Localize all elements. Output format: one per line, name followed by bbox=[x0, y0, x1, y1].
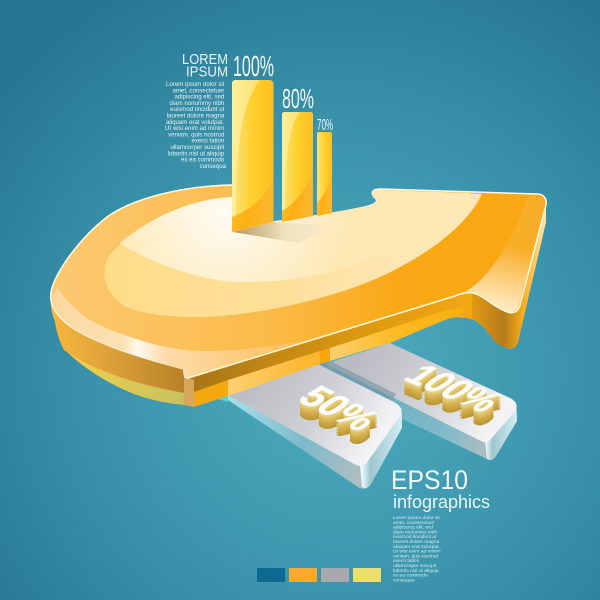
arrow tip highlight bbox=[463, 196, 545, 312]
bar 100% bbox=[232, 80, 274, 232]
text block: bottom description: euismod tincidunt ut bbox=[393, 534, 437, 540]
legend: colour swatches bbox=[257, 568, 381, 582]
label: 80%: 80% bbox=[282, 83, 314, 114]
label: 50% 3D text: 50% bbox=[288, 386, 388, 443]
label: 100% 3D text: 100% bbox=[395, 370, 513, 430]
text block: bottom description: ullamcorper suscipit bbox=[393, 563, 437, 569]
text block: bottom description: Lorem ipsum dolor sit bbox=[393, 515, 440, 521]
text block: bottom description: Ut wisi enim ad minim bbox=[393, 549, 441, 555]
text block: top description: laoreet dolore magna bbox=[167, 112, 225, 120]
arrow front edge highlight bbox=[188, 293, 484, 378]
label: 50% 3D text: 50% bbox=[288, 394, 388, 451]
text block: top description: veniam, quis nostrud bbox=[168, 131, 224, 138]
text block: bottom description: aliquam erat volutpat. bbox=[393, 544, 440, 550]
text block: top description: ullamcorper suscipit bbox=[170, 144, 225, 151]
arrow top surface bbox=[51, 185, 546, 378]
text block: top description: Ut wisi enim ad minim bbox=[165, 125, 224, 132]
panel: 50% grey arrow tab bbox=[218, 361, 402, 489]
panel: 100% grey arrow tab bbox=[325, 343, 517, 460]
label: 50% 3D text: 50% bbox=[288, 390, 388, 447]
arrow inner cream area bbox=[104, 190, 482, 317]
panel: bar chart bbox=[232, 80, 335, 243]
arrow light rim bbox=[52, 288, 320, 377]
heading: lorem ipsum: IPSUM bbox=[186, 64, 228, 80]
text block: top description: ex ea commodo bbox=[181, 157, 225, 164]
heading: lorem ipsum: LOREM bbox=[182, 52, 228, 68]
bar 70% bbox=[317, 132, 332, 216]
text block: top description: Lorem ipsum dolor sit bbox=[166, 81, 225, 88]
arrow inner glow bbox=[120, 197, 365, 282]
text block: bottom description: veniam, quis nostrud bbox=[393, 553, 438, 559]
text block: bottom description: exerci tation bbox=[393, 558, 420, 564]
label: 50% 3D text: 50% bbox=[288, 380, 388, 437]
label: 50% 3D text: 50% bbox=[288, 384, 388, 441]
text block: top description: exerci tation bbox=[191, 138, 224, 145]
text block: bottom description: lobortis nisl ut aliquip bbox=[393, 568, 439, 574]
text block: top description: diam nonummy nibh bbox=[169, 100, 224, 107]
arrow inner light area bbox=[120, 190, 470, 282]
label: 100% 3D text: 100% bbox=[395, 364, 513, 424]
heading: lorem ipsum bbox=[182, 52, 228, 80]
label: 100% 3D text: 100% bbox=[395, 366, 513, 426]
arrow front wall bbox=[184, 205, 546, 407]
label: 50% 3D text: 50% bbox=[288, 392, 388, 449]
text block: top description: adipiscing elit, sed bbox=[174, 94, 224, 101]
text block: bottom description: ex ea commodo bbox=[393, 573, 428, 579]
text block: top description: euismod tincidunt ut bbox=[170, 106, 225, 113]
text block: bottom description: amet, consectetuer bbox=[393, 520, 435, 526]
label: 100% 3D text: 100% bbox=[395, 368, 513, 428]
text block: top description: amet, consectetuer bbox=[172, 87, 224, 94]
label: 100%: 100% bbox=[233, 51, 274, 83]
label: 100% 3D text: 100% bbox=[395, 372, 513, 432]
bar 80% bbox=[282, 112, 313, 222]
text block: bottom description: laoreet dolore magna bbox=[393, 539, 439, 545]
heading: infographics: infographics bbox=[393, 492, 490, 512]
text block: top description: lobortis nisl ut aliquip bbox=[168, 150, 225, 157]
label: 100% 3D text: 100% bbox=[395, 358, 513, 418]
text block: bottom description: diam nonummy nibh bbox=[393, 529, 437, 535]
label: 50% 3D text: 50% bbox=[288, 382, 388, 439]
text: 70% bbox=[317, 117, 333, 134]
text block: top description: aliquam erat volutpat. bbox=[166, 119, 225, 126]
label: 100% 3D text: 100% bbox=[395, 362, 513, 422]
bar shadow bbox=[233, 222, 335, 243]
heading: EPS10: EPS10 bbox=[391, 465, 468, 495]
text block: bottom description: consequa bbox=[393, 578, 414, 583]
text block: top description: consequa bbox=[200, 163, 227, 170]
arrow left wall bbox=[51, 295, 185, 405]
text block: bottom description: adipiscing elit, sed bbox=[393, 525, 433, 531]
label: 50% 3D text: 50% bbox=[288, 388, 388, 445]
panel: 3D orange arrow bbox=[51, 185, 546, 407]
label: 100% 3D text: 100% bbox=[395, 360, 513, 420]
